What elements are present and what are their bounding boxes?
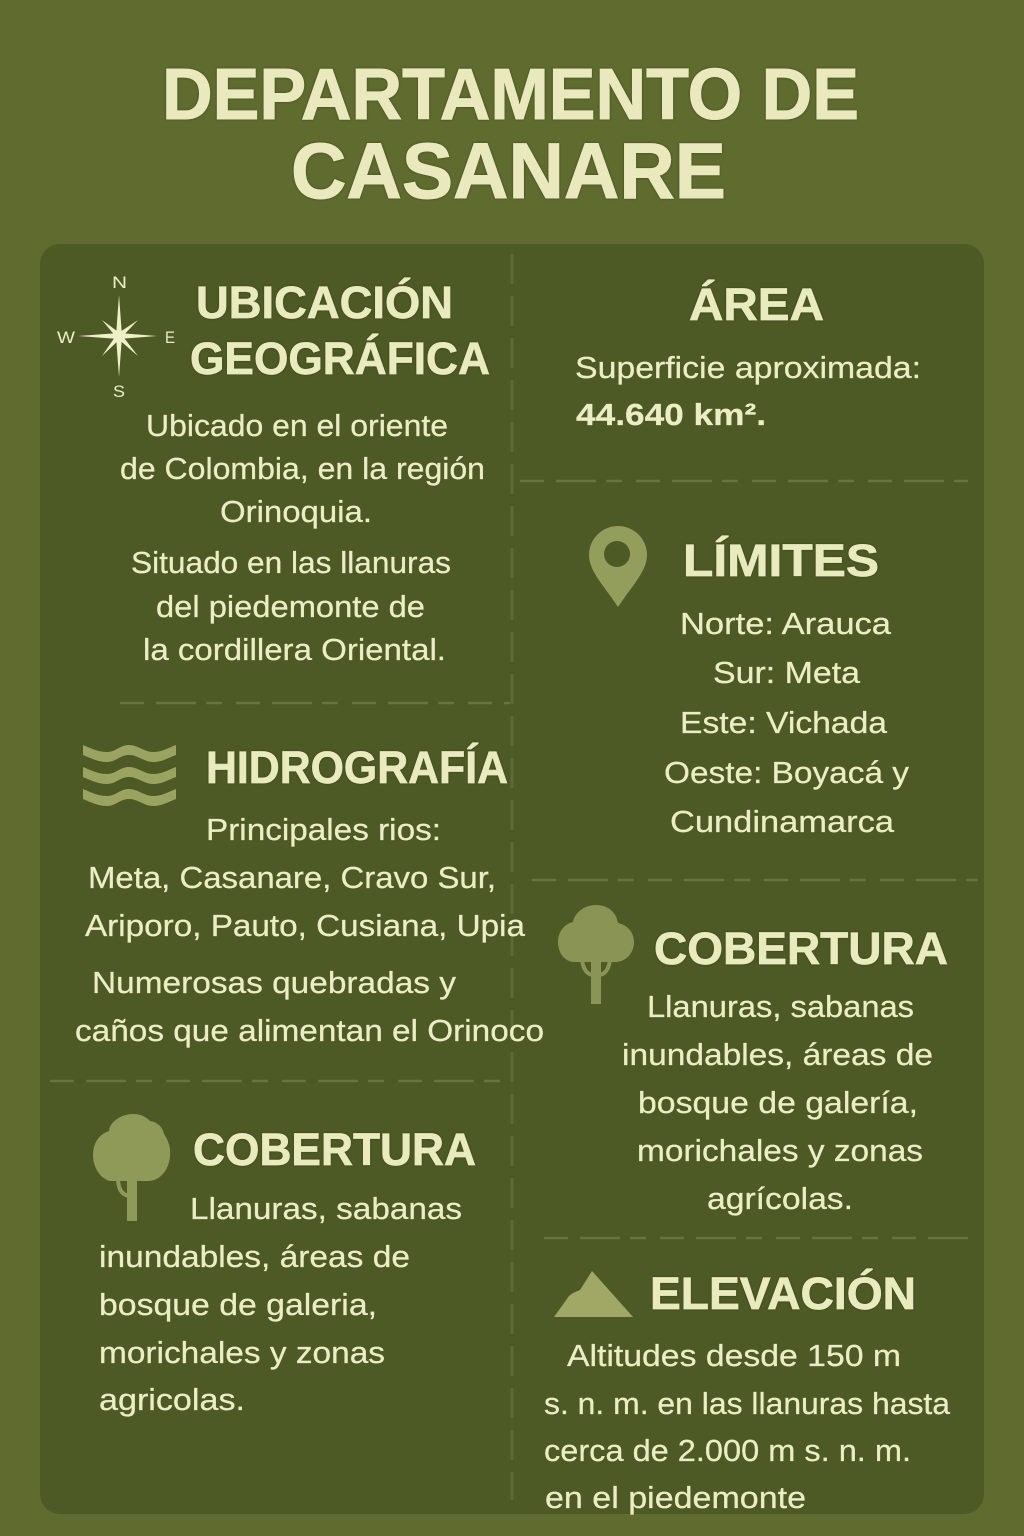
text: cobertura description [99, 1191, 462, 1417]
panel: área [575, 279, 921, 432]
icon: compass rose [57, 273, 175, 401]
text: elevación description: Altitudes desde 150 m [567, 1338, 901, 1373]
text: hidrografía description: Ariporo, Pauto, Cusiana, Upia [85, 908, 526, 943]
heading: cobertura: COBERTURA [193, 1124, 476, 1175]
text: límites list: Cundinamarca [670, 804, 895, 839]
heading: cobertura: COBERTURA [654, 923, 948, 974]
text: cobertura description: Llanuras, sabanas [647, 989, 914, 1024]
title [162, 55, 859, 215]
text: límites list: Norte: Arauca [680, 606, 892, 641]
panel: límites [589, 526, 910, 839]
icon: tree [558, 905, 634, 1004]
text: ubicación description: Situado en las llanuras [131, 545, 451, 580]
title: CASANARE [291, 126, 726, 215]
text: límites list: Oeste: Boyacá y [664, 755, 910, 790]
heading: ubicación geográfica: GEOGRÁFICA [190, 333, 490, 384]
text: área description: Superficie aproximada: [575, 350, 921, 385]
icon: tree [93, 1114, 170, 1221]
heading: elevación: ELEVACIÓN [650, 1268, 916, 1319]
text: cobertura description [622, 989, 933, 1216]
text: hidrografía description: Principales rios: [206, 812, 441, 847]
icon: compass rose: N [112, 273, 127, 292]
text: cobertura description: morichales y zonas [637, 1133, 923, 1168]
text: ubicación description: de Colombia, en la región [120, 451, 485, 486]
icon: compass rose: S [113, 382, 125, 401]
heading: ubicación geográfica: UBICACIÓN [196, 277, 453, 328]
heading: límites: LÍMITES [683, 535, 879, 586]
icon: location pin [589, 526, 647, 607]
icon: water waves [83, 745, 176, 806]
text: elevación description: cerca de 2.000 m s. n. m. [544, 1433, 911, 1468]
panel: elevación [544, 1268, 951, 1515]
text: límites list [664, 606, 910, 839]
text: cobertura description: bosque de galería, [638, 1085, 918, 1120]
panel: cobertura izquierda [93, 1114, 476, 1417]
text: límites list: Sur: Meta [713, 655, 861, 690]
text: elevación description: s. n. m. en las llanuras hasta [544, 1386, 951, 1421]
icon: mountain [554, 1271, 633, 1317]
panel: cobertura derecha [558, 905, 948, 1216]
heading: ubicación geográfica [190, 277, 490, 384]
text: límites list: Este: Vichada [680, 705, 888, 740]
icon: compass rose: W [57, 328, 75, 347]
panel: hidrografía [75, 742, 544, 1048]
text: cobertura description: inundables, áreas de [622, 1037, 933, 1072]
text: ubicación description: Ubicado en el oriente [146, 408, 448, 443]
text: hidrografía description [75, 812, 544, 1048]
text: cobertura description: bosque de galeria, [99, 1287, 377, 1322]
heading: área: ÁREA [689, 279, 824, 330]
text: hidrografía description: caños que alimentan el Orinoco [75, 1013, 544, 1048]
text: cobertura description: agrícolas. [707, 1181, 853, 1216]
text: cobertura description: morichales y zonas [99, 1335, 385, 1370]
text: hidrografía description: Meta, Casanare, Cravo Sur, [88, 860, 496, 895]
panel: main content background [40, 244, 984, 1514]
text: ubicación description [120, 408, 485, 667]
text: ubicación description: del piedemonte de [156, 589, 425, 624]
title: DEPARTAMENTO DE [162, 55, 859, 135]
text: cobertura description: inundables, áreas de [99, 1239, 410, 1274]
icon: compass rose: E [165, 328, 175, 347]
text: ubicación description: la cordillera Oriental. [143, 632, 446, 667]
text: ubicación description: Orinoquia. [220, 494, 372, 529]
text: área description [575, 350, 921, 432]
text: elevación description: en el piedemonte [545, 1480, 806, 1515]
panel: ubicación geográfica [57, 273, 490, 667]
text: área description: 44.640 km². [576, 397, 766, 432]
text: cobertura description: agricolas. [99, 1382, 245, 1417]
text: hidrografía description: Numerosas quebradas y [92, 965, 457, 1000]
heading: hidrografía: HIDROGRAFÍA [206, 742, 508, 793]
text: elevación description [544, 1338, 951, 1515]
text: cobertura description: Llanuras, sabanas [190, 1191, 462, 1226]
